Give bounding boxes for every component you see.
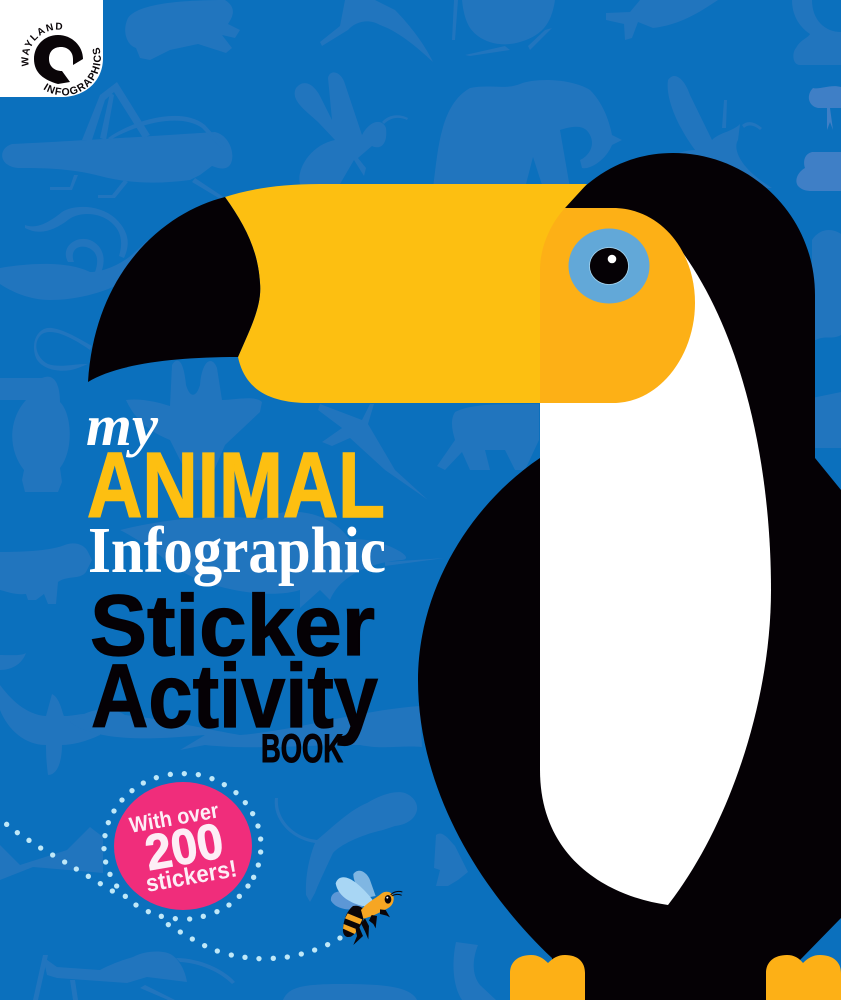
- silhouette: tortoise top: [452, 0, 555, 56]
- badge text: With over: [127, 797, 221, 838]
- eye: [385, 895, 391, 904]
- badge text: stickers!: [144, 855, 239, 898]
- silhouette: bird left: [0, 377, 70, 492]
- left foot: [510, 955, 585, 1000]
- logo ring: [34, 35, 83, 84]
- silhouette: bird top: [320, 0, 433, 62]
- silhouette: monkey: [434, 833, 468, 886]
- silhouette: clouds top right: [796, 86, 841, 191]
- publisher logo corner: INFOGRAPHICS: [44, 48, 101, 96]
- silhouette: shark left: [0, 827, 103, 880]
- face patch: [540, 208, 695, 403]
- silhouette: marlin behind Infographic: [120, 512, 445, 608]
- title line: my: my: [86, 393, 158, 458]
- toucan: [88, 153, 841, 1000]
- badge circle: [114, 782, 252, 910]
- title: [86, 393, 386, 771]
- body: [418, 153, 841, 1000]
- title line: BOOK: BOOK: [261, 727, 343, 771]
- title line: Infographic: Infographic: [88, 514, 386, 587]
- silhouette: right edge animal: [812, 230, 841, 340]
- silhouette: fish top: [606, 0, 718, 40]
- publisher logo corner: [0, 0, 103, 97]
- silhouette: banana: [454, 942, 496, 1000]
- silhouette: butterfly centre: [126, 361, 262, 480]
- badge text: 200: [141, 812, 227, 881]
- silhouette: elephant: [433, 80, 622, 188]
- silhouette: crocodile: [70, 706, 422, 750]
- title line: Sticker: Sticker: [90, 578, 375, 674]
- dotted flight path: [4, 771, 343, 961]
- title line: ANIMAL: ANIMAL: [87, 433, 385, 537]
- bill yellow: [225, 184, 587, 403]
- silhouette: whale tail pieces: [0, 653, 100, 775]
- silhouette: mosquito bottom: [33, 951, 235, 1000]
- eye: [568, 228, 650, 304]
- silhouette: lizard with tail: [0, 207, 150, 300]
- abdomen: [343, 906, 365, 937]
- silhouette: wasp left: [295, 72, 408, 184]
- publisher logo corner: WAYLAND: [21, 22, 62, 66]
- silhouette: wasp right: [650, 76, 772, 188]
- bill black tip: [88, 197, 260, 382]
- wings: [353, 871, 376, 897]
- right foot: [766, 955, 841, 1000]
- silhouette: worm: [34, 328, 92, 371]
- icon: bee: [331, 871, 402, 945]
- silhouette: grasshopper: [2, 82, 232, 200]
- badge text: [127, 796, 239, 899]
- white belly: [540, 253, 771, 905]
- silhouette: right edge animal lower: [812, 392, 841, 448]
- title line: Activity: Activity: [91, 647, 378, 747]
- silhouette: animal bottom: [283, 984, 417, 1000]
- silhouette: beetle top: [125, 0, 240, 60]
- silhouette: bear: [437, 404, 539, 470]
- silhouette: cross dragonfly: [318, 404, 428, 500]
- silhouette: panther: [275, 792, 417, 902]
- silhouette: top right animal: [792, 0, 841, 65]
- pink sticker badge: [114, 782, 252, 910]
- abdomen stripes: [343, 913, 362, 934]
- antennae and legs: [391, 891, 402, 896]
- thorax and head: [361, 892, 394, 919]
- silhouette: hippo left: [0, 543, 92, 604]
- white corner panel: [0, 0, 103, 97]
